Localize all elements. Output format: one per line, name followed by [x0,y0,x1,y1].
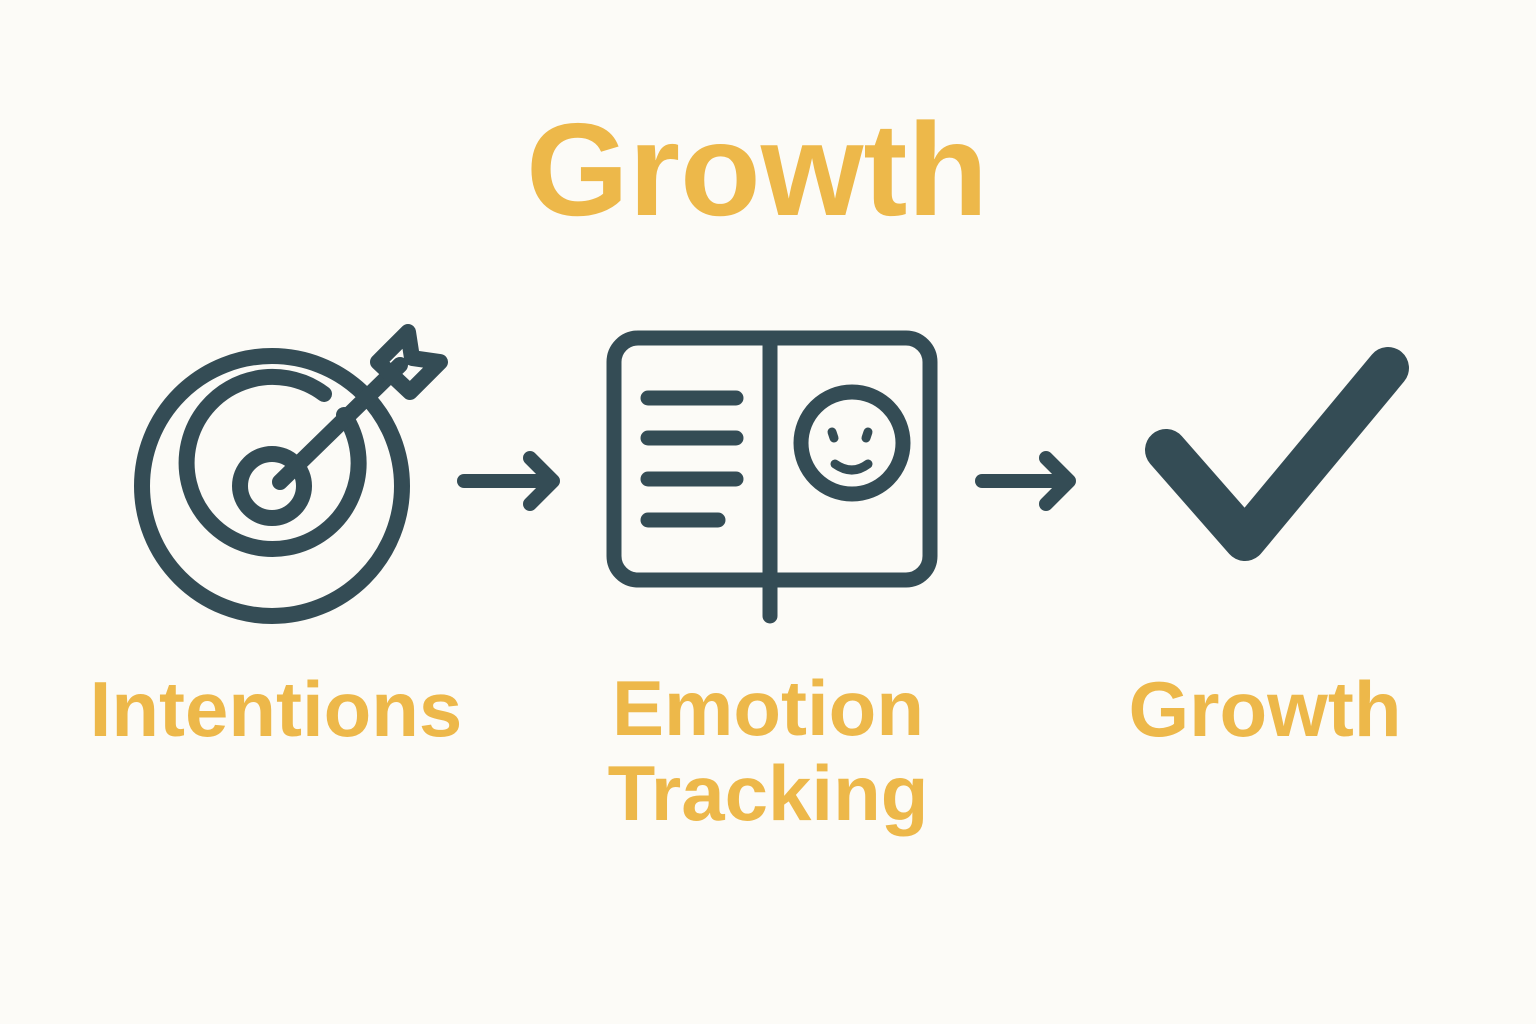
label: Intentions: Intentions [90,665,462,753]
arrow 1 [464,458,553,504]
arrow 2 [982,458,1069,504]
icon: journal [614,338,930,616]
label: Growth: Growth [1129,665,1401,753]
label: Emotion Tracking [608,664,928,837]
label: Emotion Tracking: Emotion [612,664,924,752]
title: Growth [526,96,988,243]
icon: target [142,332,440,616]
label: Emotion Tracking: Tracking [608,749,928,837]
icon: checkmark [1166,368,1388,540]
